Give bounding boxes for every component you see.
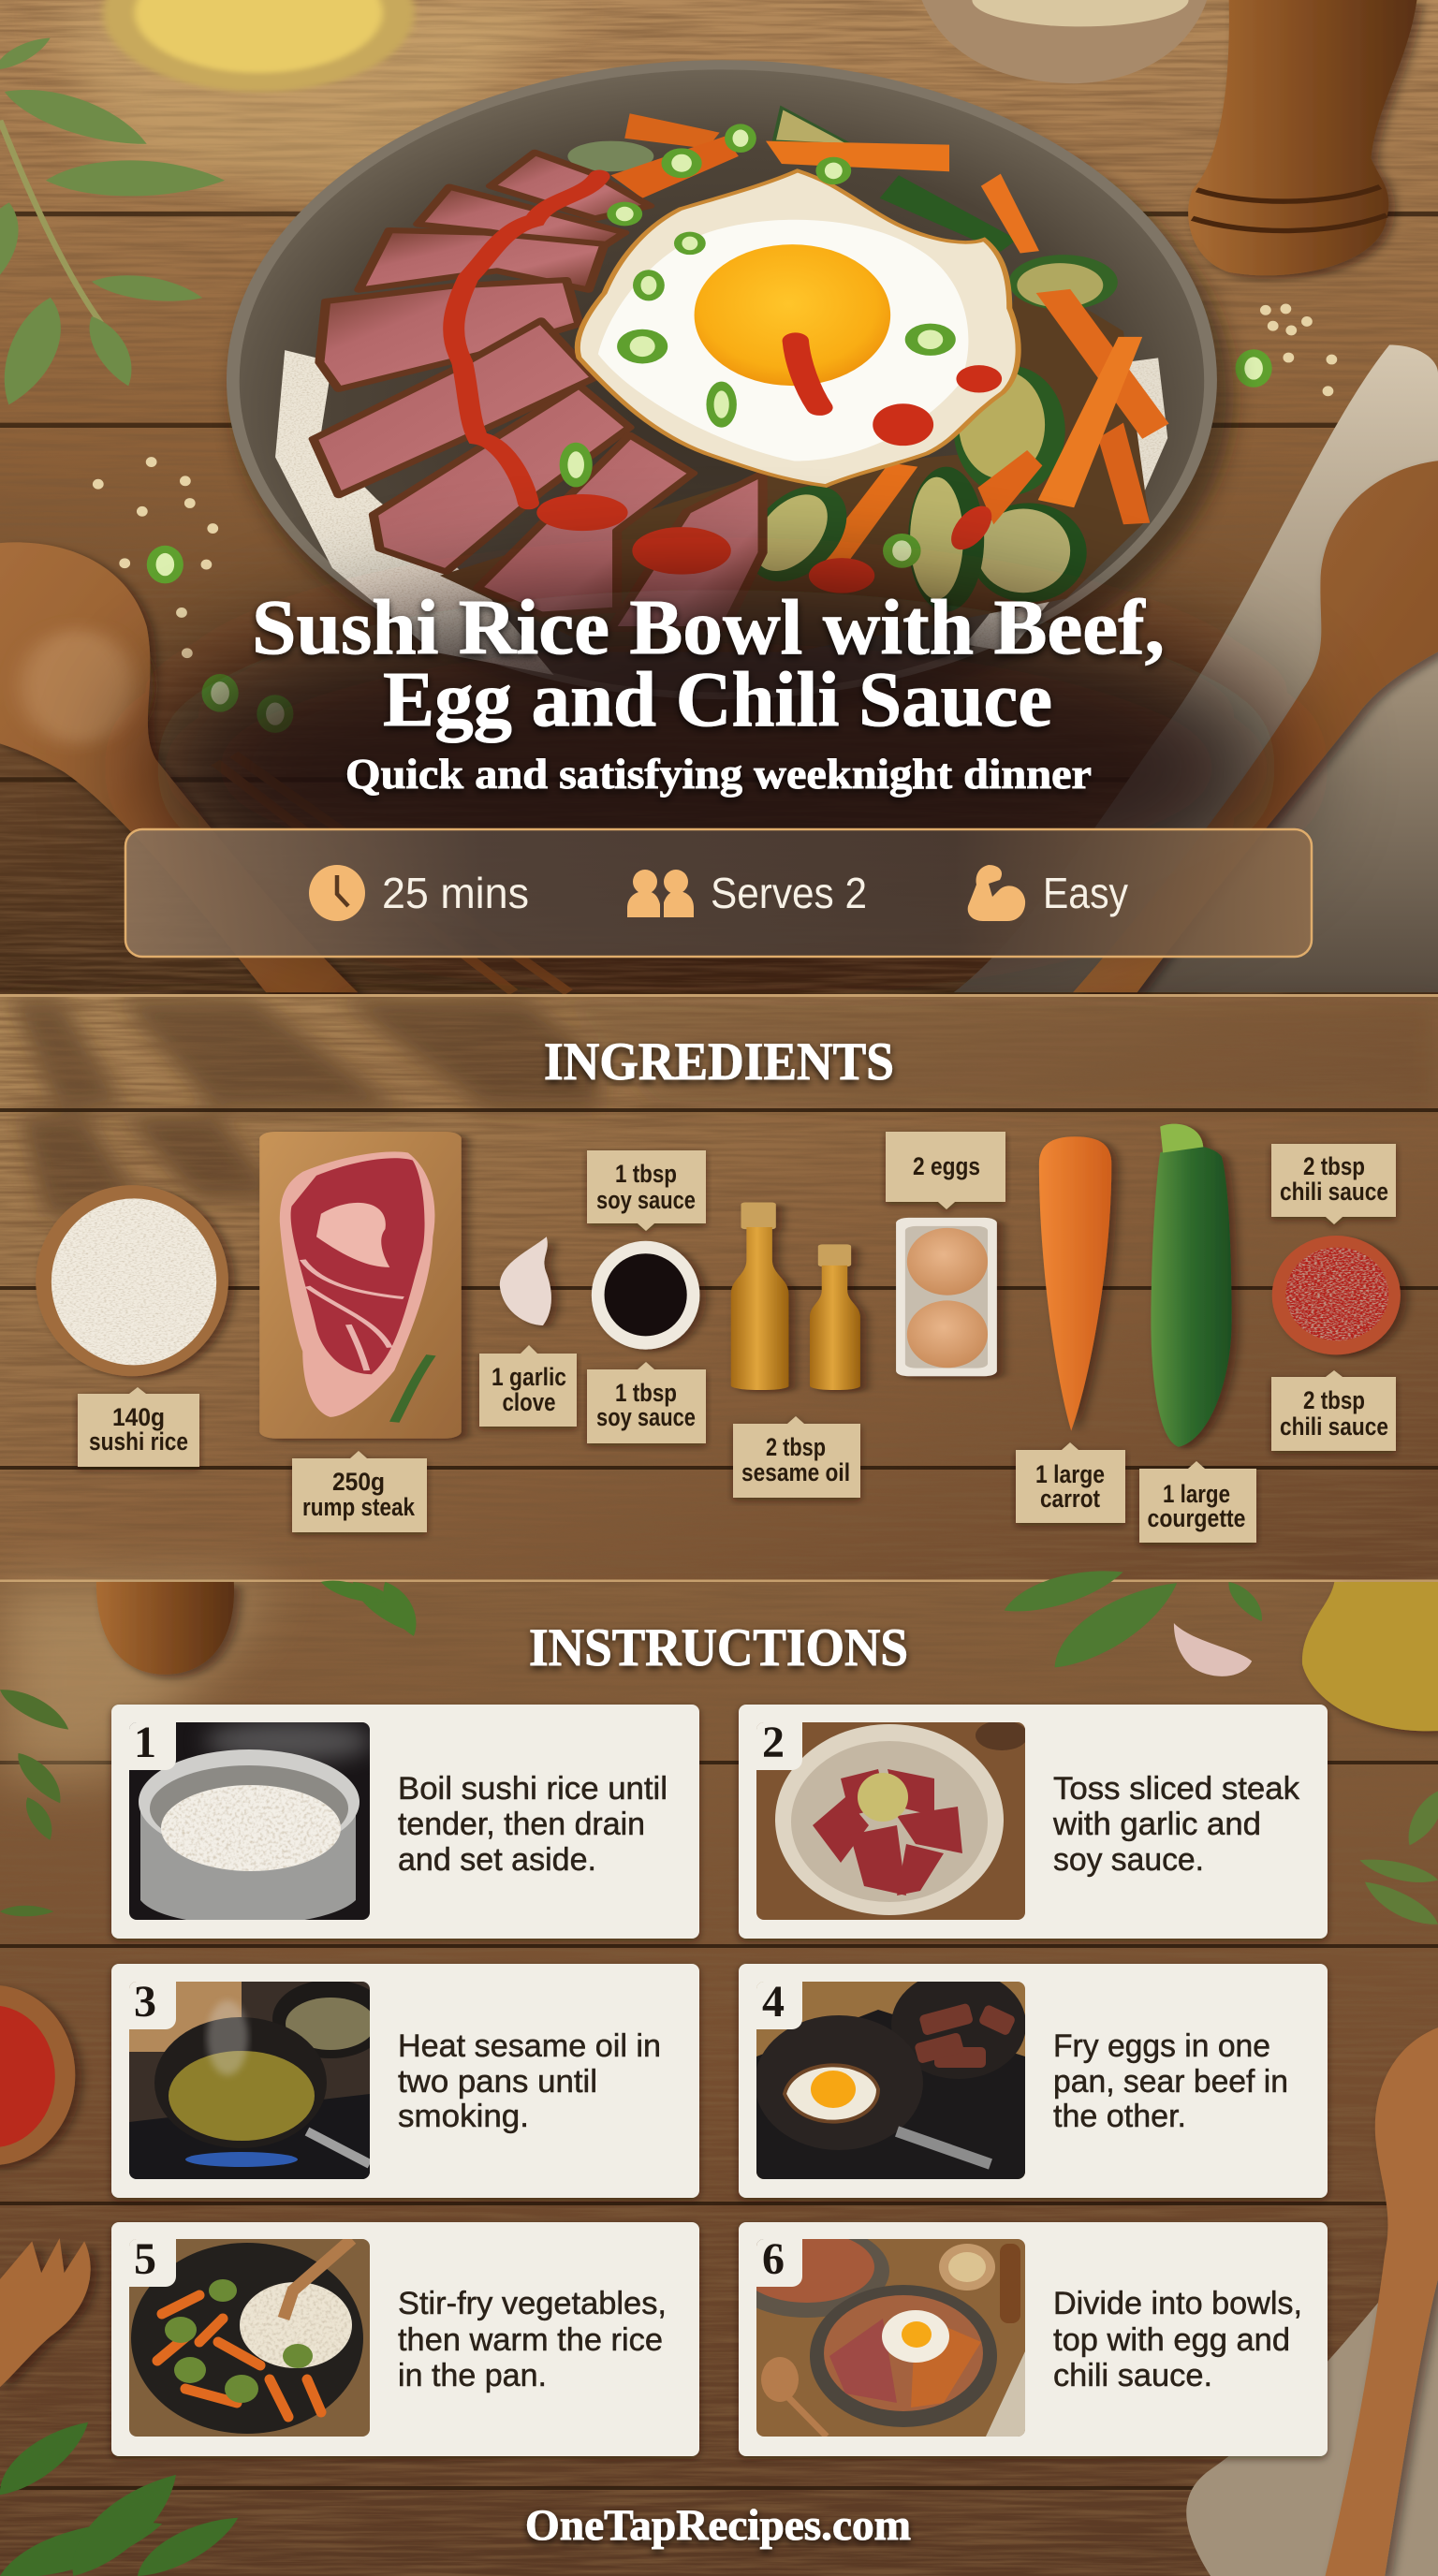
- object: parsley top: [317, 1574, 426, 1639]
- food: underlay: [440, 270, 1149, 651]
- ingredient: rump steak on board: [259, 1132, 462, 1439]
- label: courgette: [1139, 1461, 1256, 1543]
- label: chili sauce lower: 2 tbsp: [1303, 1386, 1365, 1414]
- step 1 text: and set aside.: [398, 1842, 596, 1878]
- label: soy sauce lower: soy sauce: [596, 1403, 696, 1431]
- step 6 number: 6: [762, 2234, 785, 2284]
- step 5 number: [129, 2234, 176, 2287]
- heading: ingredients: INGREDIENTS: [544, 1032, 894, 1091]
- step 1 photo: pot of rice: [129, 1720, 373, 1925]
- object: parsley bottom left: [0, 2412, 249, 2576]
- card: step 3: [111, 1964, 699, 2198]
- step 2 text: soy sauce.: [1053, 1842, 1204, 1878]
- step 5 text: in the pan.: [398, 2358, 547, 2393]
- food: fried egg: [578, 170, 1019, 486]
- title: [252, 584, 1165, 743]
- step 3 text: two pans until: [398, 2064, 597, 2100]
- step 6 number: [756, 2234, 802, 2287]
- subtitle: Quick and satisfying weeknight dinner: [345, 750, 1092, 798]
- food: rice: [275, 350, 1167, 675]
- decoration: sesame seeds and green onions: [93, 304, 1337, 733]
- card: step 5: [111, 2222, 699, 2456]
- step 1 text: [398, 1771, 668, 1878]
- card: step 1: [111, 1705, 699, 1939]
- step 4 text: pan, sear beef in: [1053, 2064, 1288, 2100]
- object: wooden spoon: [1326, 2027, 1438, 2576]
- ingredient: sesame oil bottles: [731, 1203, 860, 1390]
- step 6 text: top with egg and: [1053, 2322, 1290, 2358]
- label: rump steak: [292, 1451, 427, 1532]
- label: carrot: [1016, 1442, 1125, 1523]
- step 4 text: Fry eggs in one: [1053, 2028, 1270, 2064]
- object: chopsticks: [215, 754, 568, 992]
- step 5 text: Stir-fry vegetables,: [398, 2286, 667, 2321]
- card: step 4: [739, 1964, 1328, 2198]
- label: garlic: clove: [502, 1388, 556, 1416]
- ingredient drawings: [36, 1124, 1401, 1447]
- label: sesame oil: sesame oil: [741, 1458, 850, 1486]
- object: pepper mill: [96, 1582, 234, 1675]
- ingredient: garlic clove: [500, 1237, 551, 1325]
- step 2 text: with garlic and: [1052, 1807, 1261, 1842]
- card: step 6: [725, 2222, 1328, 2456]
- title: Sushi Rice Bowl with Beef,: [252, 584, 1165, 671]
- label: eggs: 2 eggs: [913, 1152, 980, 1180]
- label: chili sauce lower: chili sauce: [1280, 1412, 1388, 1441]
- step 1 number: [129, 1718, 176, 1770]
- object: thyme sprigs left: [0, 1682, 78, 1916]
- panel: hero: [0, 0, 1438, 996]
- food: chili sauce and onion: [454, 124, 1002, 593]
- label: soy sauce upper: soy sauce: [596, 1186, 696, 1214]
- object: left wooden spoon: [0, 542, 358, 992]
- step 2 number: [756, 1718, 802, 1770]
- step 6 text: Divide into bowls,: [1053, 2286, 1302, 2321]
- label: chili sauce upper: chili sauce: [1280, 1178, 1388, 1206]
- object: rosemary right: [1355, 1789, 1438, 1932]
- stat: difficulty: Easy: [1043, 869, 1128, 917]
- label: courgette: courgette: [1148, 1504, 1245, 1532]
- heading: instructions: INSTRUCTIONS: [529, 1618, 908, 1677]
- label: sushi rice: sushi rice: [89, 1427, 188, 1456]
- label: soy sauce lower: 1 tbsp: [615, 1379, 677, 1407]
- ingredient: soy sauce dish: [592, 1241, 699, 1350]
- step 4 number: 4: [762, 1977, 785, 2027]
- step 5 text: [398, 2286, 667, 2393]
- label: chili sauce upper: 2 tbsp: [1303, 1152, 1365, 1180]
- label: sesame oil: 2 tbsp: [766, 1433, 826, 1461]
- step 2 text: Toss sliced steak: [1053, 1771, 1300, 1807]
- ingredient: courgette: [1151, 1124, 1232, 1447]
- label: rump steak: 250g: [332, 1468, 385, 1496]
- card: step 2: [739, 1705, 1328, 1939]
- bowl food: [275, 108, 1169, 675]
- label: sushi rice: [78, 1387, 199, 1467]
- object: napkin: [1186, 2229, 1438, 2576]
- panel: recipe stats bar: [125, 829, 1312, 957]
- label: chili sauce lower: [1271, 1370, 1396, 1451]
- hero table scene: [0, 0, 1438, 992]
- object: pepper mill: [1188, 0, 1416, 275]
- title: Egg and Chili Sauce: [383, 656, 1052, 743]
- label: carrot: 1 large: [1035, 1460, 1105, 1488]
- ingredient: carrot: [1039, 1136, 1111, 1431]
- food: vegetables: [567, 108, 1169, 612]
- step 5 text: then warm the rice: [398, 2322, 663, 2358]
- step 2 number: 2: [762, 1718, 785, 1767]
- label: soy sauce lower: [587, 1362, 706, 1443]
- label: eggs: [886, 1132, 1005, 1209]
- step 4 text: [1053, 2028, 1288, 2134]
- step 1 text: tender, then drain: [398, 1807, 645, 1842]
- label: courgette: 1 large: [1163, 1480, 1230, 1508]
- object: wooden fork: [0, 2238, 91, 2387]
- icon: people: [627, 870, 694, 917]
- step 4 number: [756, 1977, 802, 2029]
- instruction table decorations: [0, 1559, 1438, 2576]
- step 3 text: smoking.: [398, 2099, 529, 2134]
- object: right wooden spoon: [1073, 461, 1438, 992]
- step 6 text: [1053, 2286, 1302, 2393]
- object: sesame bowl: [921, 0, 1207, 83]
- object: bowl: [227, 60, 1234, 715]
- icon: herb branch: [0, 32, 225, 409]
- ingredient: chili sauce jar: [1272, 1236, 1401, 1354]
- food: steak slices: [314, 153, 763, 629]
- icon: clock: [309, 865, 365, 921]
- step 5 photo: stir-fry with rice: [129, 2239, 370, 2437]
- step 6 text: chili sauce.: [1053, 2358, 1212, 2393]
- icon: flexed arm: [968, 865, 1025, 921]
- step 2 text: [1052, 1771, 1300, 1878]
- footer: website: OneTapRecipes.com: [525, 2501, 911, 2550]
- step 1 text: Boil sushi rice until: [398, 1771, 668, 1807]
- step 6 photo: finished bowls: [725, 2224, 1025, 2437]
- object: chili bowl: [0, 1985, 75, 2165]
- ingredient: eggs in tray: [896, 1218, 997, 1376]
- panel: instructions: [0, 1559, 1438, 2576]
- stat: time: 25 mins: [382, 869, 529, 917]
- label: garlic: 1 garlic: [492, 1363, 566, 1391]
- object: glass of oil: [103, 0, 415, 92]
- step 4 photo: egg and beef pans: [755, 1970, 1026, 2179]
- stat: servings: Serves 2: [711, 869, 867, 917]
- object: oil bottle: [1302, 1582, 1438, 1731]
- step 1 number: 1: [134, 1718, 156, 1767]
- label: soy sauce upper: [587, 1150, 706, 1231]
- object: garlic clove: [1174, 1623, 1252, 1676]
- label: carrot: carrot: [1040, 1485, 1100, 1513]
- step 2 photo: steak in bowl: [756, 1720, 1028, 1920]
- step 5 number: 5: [134, 2234, 156, 2284]
- step 3 photo: oil in pans: [129, 1980, 389, 2179]
- panel: ingredients: [0, 994, 1438, 1582]
- ingredient: sushi rice bowl: [36, 1185, 228, 1376]
- object: basil top right: [995, 1559, 1270, 1678]
- label: sesame oil: [733, 1416, 860, 1498]
- step 3 number: [129, 1977, 176, 2029]
- step 4 text: the other.: [1053, 2099, 1186, 2134]
- label: soy sauce upper: 1 tbsp: [615, 1160, 677, 1188]
- dark title scrim: [145, 590, 1287, 945]
- label: rump steak: rump steak: [302, 1493, 416, 1521]
- step 3 text: [398, 2028, 661, 2134]
- label: garlic: [479, 1345, 577, 1427]
- object: napkin: [954, 344, 1438, 992]
- step 3 text: Heat sesame oil in: [398, 2028, 661, 2064]
- label: sushi rice: 140g: [112, 1403, 165, 1431]
- step 3 number: 3: [134, 1977, 156, 2027]
- label: chili sauce upper: [1271, 1144, 1396, 1224]
